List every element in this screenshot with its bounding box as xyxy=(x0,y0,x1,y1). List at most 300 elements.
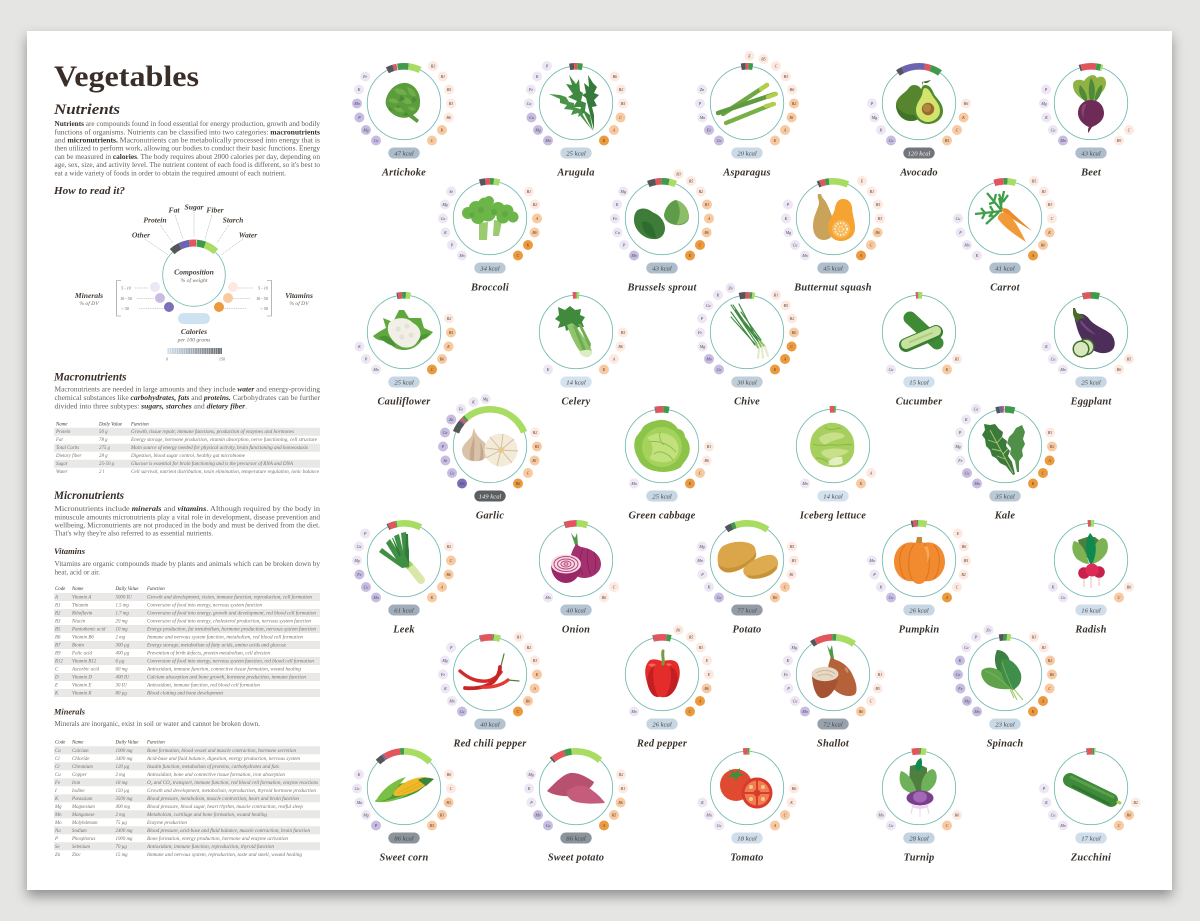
vitamins: B6 xyxy=(792,786,796,791)
minerals: P xyxy=(545,63,549,68)
calories: 61 kcal xyxy=(394,607,414,614)
table: minerals: Copper xyxy=(72,773,87,778)
vitamins: B5 xyxy=(761,56,766,61)
vitamins: A xyxy=(783,127,787,132)
minerals: K xyxy=(471,399,475,404)
icon: kale xyxy=(982,424,1025,475)
name: Zucchini xyxy=(1070,852,1111,864)
table: minerals: Enzyme production xyxy=(146,821,188,826)
minerals: P xyxy=(441,444,445,449)
minerals: Mg xyxy=(362,812,369,817)
table: minerals: Growth and development, metabolism, reproduction, thyroid hormone production xyxy=(147,789,317,794)
table: vitamins: 80 µg xyxy=(116,692,127,696)
minerals: K xyxy=(786,658,790,663)
minerals: K xyxy=(975,253,979,258)
vitamins xyxy=(942,810,962,830)
vitamins: B2 xyxy=(1050,444,1054,449)
table: vitamins: 20 mg xyxy=(116,620,128,624)
composition ring xyxy=(879,292,959,372)
vitamins: B2 xyxy=(533,202,537,207)
composition ring xyxy=(868,52,970,154)
table: vitamins: K xyxy=(54,692,59,696)
table: vitamins: Code xyxy=(55,587,66,592)
vitamins: B2 xyxy=(447,316,451,321)
minerals: Cu xyxy=(706,303,711,308)
minerals: K xyxy=(1044,800,1048,805)
panel: chive xyxy=(695,283,799,408)
vitamins xyxy=(1114,798,1141,830)
minerals: P xyxy=(374,823,378,828)
minerals: Mn xyxy=(630,481,637,486)
minerals: Fe xyxy=(362,74,368,79)
vitamins: B5 xyxy=(447,87,451,92)
vitamins: A xyxy=(783,356,787,361)
text block: nutrients: then utilized to perform work, allowing our bodies to conduct their basic functions. Energy xyxy=(54,145,321,153)
vitamins: B6 xyxy=(790,87,794,92)
table: minerals: K xyxy=(54,797,59,802)
composition labels: Fiber xyxy=(206,206,225,214)
composition ring xyxy=(614,170,710,266)
vitamins: B5 xyxy=(790,544,794,549)
vitamins: B2 xyxy=(619,87,623,92)
vitamins: C xyxy=(431,138,434,143)
minerals: Fe xyxy=(706,127,711,132)
minerals: K xyxy=(546,367,550,372)
name: Kale xyxy=(994,510,1015,522)
minerals: Mg xyxy=(698,544,705,549)
icon: red chili pepper xyxy=(460,654,519,688)
name: Chive xyxy=(734,396,760,408)
minerals: Mg xyxy=(441,202,448,207)
vitamins: B3 xyxy=(449,101,453,106)
calories: 17 kcal xyxy=(1081,835,1101,842)
minerals xyxy=(876,810,896,830)
minerals: P xyxy=(974,634,978,639)
vitamins: B6 xyxy=(526,698,530,703)
panel: spinach xyxy=(953,625,1057,750)
vitamins: A xyxy=(612,127,616,132)
calories: 77 kcal xyxy=(737,607,757,614)
calories: 45 kcal xyxy=(823,265,843,272)
minerals: K xyxy=(535,74,539,79)
calories: 34 kcal xyxy=(479,265,500,272)
name: Radish xyxy=(1074,624,1107,636)
minerals: Cu xyxy=(889,367,893,372)
text block: nutrients: eat a wide variety of foods in order to obtain the required amount of each nutrient. xyxy=(54,169,286,177)
vitamins: A xyxy=(612,356,616,361)
minerals: Cu xyxy=(460,709,464,714)
table: minerals: Bone formation, energy production, hormone and enzyme activation xyxy=(147,837,289,842)
vitamins: E xyxy=(705,658,709,663)
vitamins: B6 xyxy=(704,230,709,235)
panel: red pepper xyxy=(618,625,714,750)
table: minerals: Calcium xyxy=(72,749,89,754)
table: minerals: Chromium xyxy=(72,765,93,770)
legend: calories: Calories xyxy=(181,327,207,336)
name: Celery xyxy=(562,396,591,408)
minerals: K xyxy=(615,202,619,207)
panel: pumpkin xyxy=(867,516,971,636)
legend: minerals xyxy=(74,280,174,316)
vitamins: B3 xyxy=(878,216,882,221)
table: minerals: Mn xyxy=(54,813,62,818)
icon: red pepper xyxy=(645,651,680,697)
name: Tomato xyxy=(730,852,764,864)
vitamins: C xyxy=(431,367,434,372)
composition ring xyxy=(352,736,456,840)
vitamins: B6 xyxy=(955,812,959,817)
heading: how to read it: How to read it? xyxy=(53,186,125,197)
vitamins: B2 xyxy=(527,645,531,650)
legend: vitamins: 5 - 10 xyxy=(258,286,269,290)
calories: 25 kcal xyxy=(566,150,586,157)
vitamins: A xyxy=(869,470,873,475)
calories: 41 kcal xyxy=(995,265,1015,272)
table: vitamins: Calcium absorption and bone growth, hormone production, immune function xyxy=(147,676,307,680)
minerals: K xyxy=(1044,115,1048,120)
table: vitamins: Vitamin A xyxy=(72,596,91,600)
vitamins xyxy=(770,290,799,374)
vitamins: B1 xyxy=(676,627,681,632)
minerals: Mn xyxy=(1059,823,1066,828)
minerals: K xyxy=(879,584,883,589)
table: vitamins: 10 mg xyxy=(116,628,128,632)
vitamins: C xyxy=(870,698,873,703)
text block: nutrients: can be measured in calories. The body requires about 2000 calories per day, depending on xyxy=(54,153,321,161)
vitamins: B6 xyxy=(516,481,520,486)
table: minerals: Manganese xyxy=(71,813,95,818)
minerals: K xyxy=(1044,344,1048,349)
calories: 25 kcal xyxy=(394,379,414,386)
minerals: P xyxy=(786,202,790,207)
vitamins: K xyxy=(446,344,450,349)
minerals: Se xyxy=(444,458,448,463)
panel: cucumber xyxy=(879,292,962,408)
legend: vitamins: 10 - 50 xyxy=(256,296,269,301)
table: vitamins: Vitamin K xyxy=(72,692,92,696)
minerals: Mn xyxy=(705,812,712,817)
icon: spinach xyxy=(981,650,1023,700)
table: macronutrients: Dietary fiber xyxy=(55,454,81,459)
table: vitamins: B5 xyxy=(55,628,61,632)
composition ring xyxy=(618,630,706,718)
minerals: Mn xyxy=(630,709,637,714)
table: vitamins: Riboflavin xyxy=(71,612,93,616)
vitamins: B2 xyxy=(961,572,966,577)
table: vitamins: Ascorbic acid xyxy=(71,668,100,672)
vitamins: C xyxy=(450,786,453,791)
legend: minerals: % of DV xyxy=(79,300,99,307)
name: Green cabbage xyxy=(629,510,696,522)
table: macronutrients: Glucose is essential for brain functioning and is the precursor of RNA and DNA xyxy=(131,462,293,467)
vitamins: C xyxy=(517,253,520,258)
composition ring xyxy=(705,61,789,145)
vitamins: B5 xyxy=(689,634,693,639)
icon: shallot xyxy=(812,645,857,698)
calories: 72 kcal xyxy=(823,721,843,728)
composition ring xyxy=(445,629,535,719)
table: minerals: 1000 mg xyxy=(116,749,133,754)
vitamins: B2 xyxy=(1048,658,1052,663)
legend: vitamins: Vitamins xyxy=(285,291,313,300)
vitamins: C xyxy=(1048,686,1051,691)
vitamins: B1 xyxy=(1042,645,1046,650)
composition labels xyxy=(132,202,258,240)
vitamins: B6 xyxy=(440,356,444,361)
calories: 120 kcal xyxy=(908,150,931,157)
calories: 47 kcal xyxy=(394,150,414,157)
table: macronutrients: Digestion, blood sugar control, healthy gut microbiome xyxy=(130,454,246,459)
table: minerals: Function xyxy=(146,740,165,746)
vitamins: E xyxy=(707,672,711,677)
composition ring xyxy=(793,406,873,486)
minerals: Cu xyxy=(527,101,531,106)
vitamins xyxy=(513,632,542,716)
minerals: P xyxy=(529,800,533,805)
table: macronutrients: 2 l xyxy=(99,470,105,475)
minerals: Mn xyxy=(801,709,808,714)
table: minerals: Metabolism, cartilage and bone formation, wound healing xyxy=(146,813,268,818)
table: vitamins: 30 IU xyxy=(116,684,127,688)
vitamins: C xyxy=(775,63,778,68)
minerals: P xyxy=(622,242,626,247)
vitamins: B1 xyxy=(532,458,537,463)
vitamins xyxy=(599,582,619,602)
vitamins: C xyxy=(613,584,616,589)
panel: celery xyxy=(536,292,628,408)
vitamins: B9 xyxy=(1117,138,1121,143)
title: Vegetables xyxy=(54,61,199,93)
vitamins: B6 xyxy=(602,595,606,600)
heading: macronutrients: Macronutrients xyxy=(53,372,127,384)
text block: vitamins: Vitamins are organic compounds made by plants and animals which can be broken down by xyxy=(54,560,321,568)
vitamins: C xyxy=(784,584,787,589)
vitamins: B1 xyxy=(441,74,445,79)
vitamins xyxy=(599,328,628,374)
table: macronutrients: Growth, tissue repair, immune functions, production of enzymes and hormones xyxy=(131,430,294,435)
text block: macronutrients xyxy=(54,386,321,410)
vitamins: C xyxy=(956,584,959,589)
minerals: Fe xyxy=(356,572,362,577)
composition caption xyxy=(174,268,214,284)
panel: brussels sprout xyxy=(610,169,714,294)
table: minerals: 2 mg xyxy=(116,813,126,818)
vitamins: B6 xyxy=(964,101,968,106)
text block: vitamins: heat, acid or air. xyxy=(54,568,100,576)
table: vitamins: E xyxy=(54,684,58,688)
calories: 86 kcal xyxy=(566,835,586,842)
table: minerals: Cr xyxy=(55,765,60,770)
vitamins: B5 xyxy=(955,356,959,361)
vitamins: B6 xyxy=(1117,367,1121,372)
table: minerals: Ca xyxy=(55,749,61,754)
vitamins: B1 xyxy=(621,786,625,791)
panel: introduction and tables xyxy=(53,61,321,858)
name: Iceberg lettuce xyxy=(799,510,866,522)
minerals: Ca xyxy=(956,672,960,677)
table: vitamins: Biotin xyxy=(72,644,85,648)
vitamins: B1 xyxy=(527,189,531,194)
composition ring xyxy=(530,514,622,606)
table: vitamins: Thiamin xyxy=(72,604,89,608)
vitamins: B6 xyxy=(613,74,617,79)
name: Carrot xyxy=(990,282,1021,294)
vitamins: B3 xyxy=(1048,430,1052,435)
vitamins: A xyxy=(707,216,711,221)
table: vitamins: Energy production, fat metabolism, hormone production, nervous system function xyxy=(146,628,317,632)
minerals xyxy=(524,61,553,146)
heading: nutrients: Nutrients xyxy=(53,102,120,118)
vitamins xyxy=(942,354,962,374)
minerals: Cu xyxy=(1051,127,1055,132)
vitamins: B2 xyxy=(533,430,537,435)
panel: sweet potato xyxy=(524,736,628,864)
table: vitamins: Function xyxy=(146,587,165,592)
vitamins: B3 xyxy=(1032,634,1036,639)
table: minerals: Zinc xyxy=(72,853,82,858)
minerals: Mn xyxy=(696,558,703,563)
vitamins: A xyxy=(698,698,702,703)
table: vitamins: Pantothenic acid xyxy=(71,628,106,632)
table: macronutrients: Total Carbs xyxy=(56,446,79,451)
text block: nutrients: age, sex, size, and activity level. The nutrient content of each food is different, so it's best to xyxy=(54,161,321,169)
vitamins: B3 xyxy=(699,645,703,650)
vitamins xyxy=(427,770,456,830)
vitamins xyxy=(674,169,714,260)
table: minerals: Cl xyxy=(55,757,60,762)
icon: cucumber xyxy=(906,318,937,345)
vitamins: C xyxy=(527,470,530,475)
table: vitamins: Daily Value xyxy=(114,587,139,592)
vitamins: C xyxy=(517,709,520,714)
vitamins xyxy=(685,442,714,488)
minerals: Cu xyxy=(964,645,969,650)
name: Onion xyxy=(562,624,590,636)
panel: red chili pepper xyxy=(438,629,542,750)
minerals: P xyxy=(700,316,704,321)
table: vitamins: 400 µg xyxy=(116,652,130,656)
calories: 28 kcal xyxy=(909,835,929,842)
vitamins: K xyxy=(602,367,606,372)
panel: beet xyxy=(1039,57,1137,178)
panel: sweet corn xyxy=(352,736,456,864)
minerals: P xyxy=(698,101,702,106)
vitamins: K xyxy=(1047,230,1051,235)
table: vitamins: 1.7 mg xyxy=(116,612,129,616)
table: vitamins: D xyxy=(54,676,59,680)
table: minerals: Na xyxy=(54,829,61,834)
table: minerals: 1000 mg xyxy=(116,837,133,842)
text block: nutrients: Nutrients are compounds found in food essential for energy production, growth and bodily xyxy=(54,120,321,128)
minerals: Mn xyxy=(448,698,455,703)
legend: minerals: Minerals xyxy=(74,291,103,300)
table: minerals: Name xyxy=(71,740,84,746)
minerals xyxy=(867,556,896,602)
minerals xyxy=(352,528,381,602)
legend: calories: 150 xyxy=(219,356,226,362)
name: Arugula xyxy=(556,168,595,178)
name: Red pepper xyxy=(636,738,688,750)
minerals: Mn xyxy=(458,253,465,258)
name: Potato xyxy=(733,624,761,636)
icon: chive xyxy=(731,304,768,358)
vitamins: A xyxy=(535,216,539,221)
vitamins: B6 xyxy=(1041,242,1045,247)
vitamins: C xyxy=(1128,127,1131,132)
table: minerals: Immune and nervous system, reproduction, taste and smell, wound healing xyxy=(146,853,303,858)
vitamins: B5 xyxy=(430,823,434,828)
icon: radish xyxy=(1072,533,1108,588)
composition ring xyxy=(355,511,453,609)
vitamins: B1 xyxy=(517,634,521,639)
vitamins xyxy=(599,770,628,830)
calories: 35 kcal xyxy=(994,493,1015,500)
minerals: P xyxy=(1044,87,1048,92)
legend: calories: 0 xyxy=(166,356,169,362)
vitamins: C xyxy=(946,823,949,828)
table: minerals: 75 µg xyxy=(116,821,127,826)
table: minerals: Mg xyxy=(54,805,62,810)
name: Brussels sprout xyxy=(626,282,697,294)
minerals: Zn xyxy=(449,417,453,422)
minerals: Cu xyxy=(717,595,721,600)
table: macronutrients: Daily Value xyxy=(98,422,123,427)
table: macronutrients: Fat xyxy=(55,438,63,443)
name: Avocado xyxy=(899,168,938,178)
table: vitamins: Energy storage, metabolism of fatty acids, amino acids and glucose xyxy=(146,644,287,648)
minerals: Se xyxy=(449,189,453,194)
vitamins: K xyxy=(945,367,949,372)
table: minerals: Chloride xyxy=(72,757,90,762)
table: minerals: Blood pressure, acid-base and fluid balance, muscle contraction, brain function xyxy=(147,829,311,834)
panel: potato xyxy=(695,509,799,636)
table: minerals: 2400 mg xyxy=(116,829,133,834)
vitamins: B2 xyxy=(447,544,451,549)
vitamins: K xyxy=(773,138,777,143)
panel: green cabbage xyxy=(619,403,714,522)
table: vitamins: B3 xyxy=(55,620,61,624)
table: macronutrients: 275 g xyxy=(99,446,111,451)
vitamins: B5 xyxy=(1032,178,1036,183)
table: vitamins: Name xyxy=(71,587,84,592)
composition caption: % of weight xyxy=(181,277,208,284)
vitamins: B3 xyxy=(676,171,681,176)
minerals xyxy=(697,798,724,830)
icon: sweet corn xyxy=(375,777,434,802)
table: minerals: 15 mg xyxy=(116,853,128,858)
minerals: Mg xyxy=(620,189,626,194)
vitamins: B2 xyxy=(699,189,703,194)
table: minerals: 3400 mg xyxy=(116,757,133,762)
minerals: Mn xyxy=(963,242,970,247)
icon: cauliflower xyxy=(373,310,433,350)
minerals: Mn xyxy=(973,481,980,486)
icon: zucchini xyxy=(1070,777,1120,804)
minerals: K xyxy=(700,800,704,805)
name: Sweet corn xyxy=(379,852,429,864)
minerals: K xyxy=(357,772,361,777)
minerals xyxy=(1039,84,1068,146)
text block: nutrients: functions of organisms. Nutrients can be classified into two categories: macronutrients xyxy=(54,128,320,136)
legend: minerals: 5 - 10 xyxy=(121,286,132,290)
minerals: Mn xyxy=(1059,138,1066,143)
calories: 40 kcal xyxy=(566,607,586,614)
composition ring xyxy=(782,623,884,725)
table: minerals: Antioxidant, immune function, reproduction, thyroid function xyxy=(146,845,275,850)
calories: 26 kcal xyxy=(652,721,672,728)
table: vitamins: B1 xyxy=(55,604,60,608)
vitamins: B6 xyxy=(1127,584,1131,589)
